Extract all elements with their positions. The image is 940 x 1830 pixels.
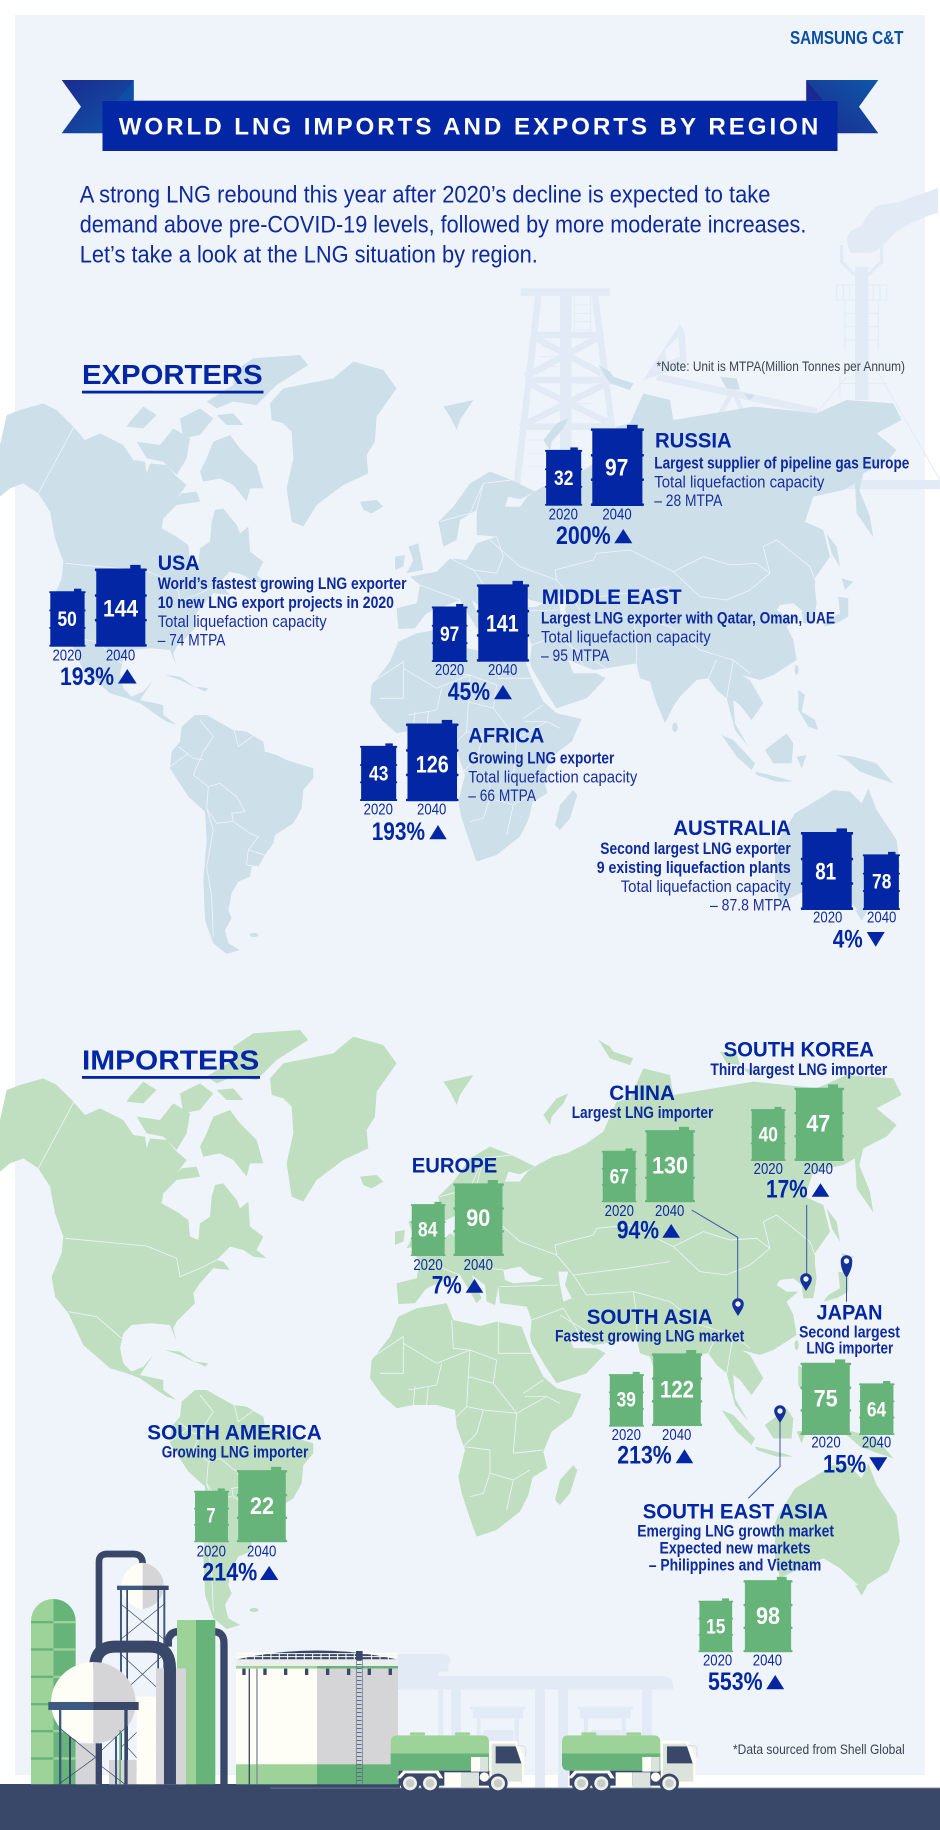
exporter: USA: USA xyxy=(158,552,200,575)
change: South Korea 17% up: 17% xyxy=(766,1176,808,1204)
barrels: Japan: 75 xyxy=(814,1386,838,1413)
note: data source: *Data sourced from Shell Global xyxy=(733,1741,905,1757)
barrels: Australia xyxy=(801,828,900,927)
logo: Samsung C&T: SAMSUNG C&T xyxy=(790,28,904,48)
barrels: South Asia: 2040 xyxy=(662,1427,691,1444)
small sphere on tower xyxy=(117,1563,169,1609)
description: USA: Total liquefaction capacity xyxy=(158,612,327,631)
importer: South East Asia: SOUTH EAST ASIA xyxy=(643,1500,828,1523)
intro text: A strong LNG rebound this year after 2020’s decline is expected to take xyxy=(80,182,770,209)
description: Russia: Total liquefaction capacity xyxy=(654,472,825,491)
exporter: USA xyxy=(49,552,407,691)
green column xyxy=(156,1620,224,1784)
change: Australia 4% down: 4% xyxy=(833,925,863,953)
change: China 94% up: 94% xyxy=(617,1216,659,1244)
section heading: importers: IMPORTERS xyxy=(82,1044,259,1075)
barrels: South Korea: 40 xyxy=(759,1124,778,1147)
ground xyxy=(0,1784,940,1830)
barrels: South East Asia: 98 xyxy=(756,1603,780,1630)
exporter: Russia xyxy=(545,425,909,550)
description: Japan xyxy=(799,1323,900,1358)
description: Australia: 9 existing liquefaction plants xyxy=(597,858,791,877)
arched pipe xyxy=(95,1647,170,1784)
change: USA 193% up: 193% xyxy=(60,663,114,691)
barrels: South America: 2020 xyxy=(197,1544,226,1561)
exporter: Middle East xyxy=(432,581,835,706)
illustration: refinery towers and spheres xyxy=(31,1554,398,1784)
barrels: USA xyxy=(49,565,147,664)
barrels: Japan: 64 xyxy=(867,1399,886,1422)
description: South Asia: Fastest growing LNG market xyxy=(555,1327,745,1346)
description: USA: 10 new LNG export projects in 2020 xyxy=(158,593,394,612)
description: South East Asia xyxy=(637,1522,834,1574)
change: South America 214% up: 214% xyxy=(202,1559,257,1587)
description: Russia: – 28 MTPA xyxy=(654,491,723,510)
barrels: South East Asia: 2020 xyxy=(703,1653,732,1670)
barrels: Japan: 2020 xyxy=(811,1434,841,1451)
importer: South America: SOUTH AMERICA xyxy=(147,1421,322,1444)
barrels: Japan: 2040 xyxy=(862,1434,891,1451)
barrels: Australia: 2040 xyxy=(867,910,896,927)
barrels: USA: 2020 xyxy=(52,648,82,664)
barrels: South East Asia: 2040 xyxy=(753,1653,782,1670)
importer: Europe: EUROPE xyxy=(412,1155,497,1178)
LNG storage tank xyxy=(236,1650,398,1784)
barrels: South America: 7 xyxy=(206,1504,216,1527)
connector lines and location pins xyxy=(692,1205,852,1498)
change: South East Asia 553% up: 553% xyxy=(708,1668,763,1696)
description: South America: Growing LNG importer xyxy=(162,1443,309,1462)
background illustration: oil rig, pumpjack and stack xyxy=(517,188,940,489)
description: Australia xyxy=(597,839,791,915)
pin: Japan xyxy=(841,1255,852,1278)
pin: South Korea xyxy=(800,1273,812,1291)
barrels: Africa xyxy=(360,720,459,818)
importer: South East Asia xyxy=(637,1500,834,1696)
barrels: Africa: 126 xyxy=(416,751,449,778)
barrels: Middle East: 97 xyxy=(440,623,459,646)
barrels: South Asia: 2020 xyxy=(612,1427,641,1444)
description: Australia: Total liquefaction capacity xyxy=(621,877,791,896)
barrels: Middle East: 2040 xyxy=(488,662,517,679)
exporter: Australia: AUSTRALIA xyxy=(673,817,791,840)
importer: Japan: JAPAN xyxy=(816,1301,882,1324)
description: USA xyxy=(158,574,407,650)
barrels: Africa: 43 xyxy=(369,763,388,786)
importer: South Korea xyxy=(710,1039,888,1204)
barrels: Middle East: 141 xyxy=(486,611,519,638)
barrels: Russia: 2040 xyxy=(602,506,632,523)
barrels: Europe: 2020 xyxy=(413,1257,443,1274)
exporter: Africa xyxy=(360,720,638,846)
description: South Korea: Third largest LNG importer xyxy=(710,1060,888,1079)
importer: South Korea: SOUTH KOREA xyxy=(724,1039,874,1062)
barrels: Russia: 2020 xyxy=(549,506,578,523)
change: Russia 200% up: 200% xyxy=(556,522,611,550)
barrels: Europe xyxy=(411,1180,504,1274)
title text: WORLD LNG IMPORTS AND EXPORTS BY REGION xyxy=(119,113,821,140)
barrels: Australia: 78 xyxy=(872,871,892,894)
description: Australia: Second largest LNG exporter xyxy=(600,839,791,858)
barrels: Japan xyxy=(800,1359,894,1451)
intro text: demand above pre-COVID-19 levels, followed by more moderate increases. xyxy=(80,212,806,239)
support blocks xyxy=(76,1697,156,1784)
truck 1 xyxy=(391,1732,526,1793)
barrels: South East Asia xyxy=(698,1577,793,1670)
barrels: Africa: 2040 xyxy=(417,801,446,818)
description: South East Asia: Expected new markets xyxy=(660,1539,811,1558)
title ribbon xyxy=(62,80,878,151)
description: Africa xyxy=(468,748,638,805)
large sphere xyxy=(48,1662,139,1784)
barrels: Europe: 2040 xyxy=(464,1257,493,1274)
barrels: China: 130 xyxy=(652,1152,688,1179)
barrels: South East Asia: 15 xyxy=(706,1615,726,1638)
change: Middle East 45% up: 45% xyxy=(448,678,490,706)
barrels: South Asia xyxy=(609,1350,702,1444)
barrels: China xyxy=(602,1127,695,1220)
importer: South Asia xyxy=(555,1306,745,1469)
barrels: South America xyxy=(194,1467,287,1561)
description: Japan: LNG importer xyxy=(806,1339,894,1358)
section heading: exporters: EXPORTERS xyxy=(82,359,263,390)
exporter: Australia xyxy=(597,817,900,953)
description: Australia: – 87.8 MTPA xyxy=(710,896,791,915)
barrels: USA: 144 xyxy=(103,596,139,622)
barrels: Russia: 97 xyxy=(605,455,628,482)
barrels: South America: 2040 xyxy=(247,1544,276,1561)
change: Europe 7% up: 7% xyxy=(432,1271,462,1299)
barrels: USA: 50 xyxy=(57,608,77,631)
intro text xyxy=(80,182,806,269)
pin: China xyxy=(732,1298,744,1316)
description: Africa: Total liquefaction capacity xyxy=(468,767,638,786)
barrels: Europe: 84 xyxy=(418,1219,438,1242)
exporter: Russia: RUSSIA xyxy=(655,430,732,453)
map: importers world map xyxy=(0,1030,902,1629)
barrels: China: 2040 xyxy=(655,1203,684,1220)
barrels: South Korea: 2040 xyxy=(804,1161,833,1178)
barrels: South America: 22 xyxy=(250,1493,274,1520)
exporter: Africa: AFRICA xyxy=(468,725,544,748)
importer: Europe xyxy=(411,1155,504,1299)
barrels: South Korea: 47 xyxy=(806,1111,830,1138)
truck 2 xyxy=(562,1732,697,1793)
importer: Japan xyxy=(799,1301,900,1479)
description: Middle East: Largest LNG exporter with Qatar, Oman, UAE xyxy=(541,608,835,627)
background illustration: loading terminal xyxy=(398,1654,673,1788)
exporter: Middle East: MIDDLE EAST xyxy=(542,586,682,609)
description: Africa: – 66 MTPA xyxy=(468,786,537,805)
description: USA: – 74 MTPA xyxy=(158,631,226,650)
map: exporters world map xyxy=(0,355,902,954)
description: Middle East xyxy=(541,608,835,665)
barrels: Australia: 81 xyxy=(815,858,836,885)
intro text: Let’s take a look at the LNG situation by region. xyxy=(80,242,538,269)
description: Japan: Second largest xyxy=(799,1323,900,1342)
importer: China: CHINA xyxy=(609,1082,675,1105)
change: Australia 4% down xyxy=(833,925,885,953)
description: China: Largest LNG importer xyxy=(572,1103,714,1122)
description: USA: World’s fastest growing LNG exporter xyxy=(158,574,407,593)
barrels: Australia: 2020 xyxy=(813,910,842,927)
barrels: Europe: 90 xyxy=(466,1205,490,1232)
barrels: South Asia: 39 xyxy=(617,1389,636,1412)
description: South East Asia: Emerging LNG growth market xyxy=(637,1522,834,1541)
change: South Asia 213% up: 213% xyxy=(617,1441,672,1469)
barrels: China: 2020 xyxy=(605,1203,634,1220)
barrels: South Korea: 2020 xyxy=(754,1161,783,1178)
description: Africa: Growing LNG exporter xyxy=(468,748,615,767)
importer: China xyxy=(572,1082,714,1244)
barrels: Russia xyxy=(545,425,644,523)
barrels: China: 67 xyxy=(610,1165,629,1188)
barrels: Middle East xyxy=(432,581,529,679)
description: Middle East: Total liquefaction capacity xyxy=(541,627,711,646)
pin: South East Asia xyxy=(774,1405,786,1423)
change: Africa 193% up: 193% xyxy=(372,818,425,846)
change: Japan 15% down: 15% xyxy=(823,1451,866,1479)
description: Russia xyxy=(654,453,909,510)
barrels: USA: 2040 xyxy=(106,648,135,664)
barrels: Middle East: 2020 xyxy=(435,662,464,679)
barrels: Africa: 2020 xyxy=(364,801,393,818)
importer: South Asia: SOUTH ASIA xyxy=(587,1306,713,1329)
barrels: South Asia: 122 xyxy=(660,1376,694,1403)
lattice tower xyxy=(120,1590,165,1784)
tall pipe xyxy=(99,1554,143,1653)
importer: South America xyxy=(147,1421,322,1587)
silo xyxy=(31,1599,76,1784)
description: South East Asia: – Philippines and Vietnam xyxy=(649,1555,821,1574)
barrels: Russia: 32 xyxy=(554,467,573,490)
barrels: South Korea xyxy=(751,1084,844,1178)
description: Middle East: – 95 MTPA xyxy=(541,646,610,665)
